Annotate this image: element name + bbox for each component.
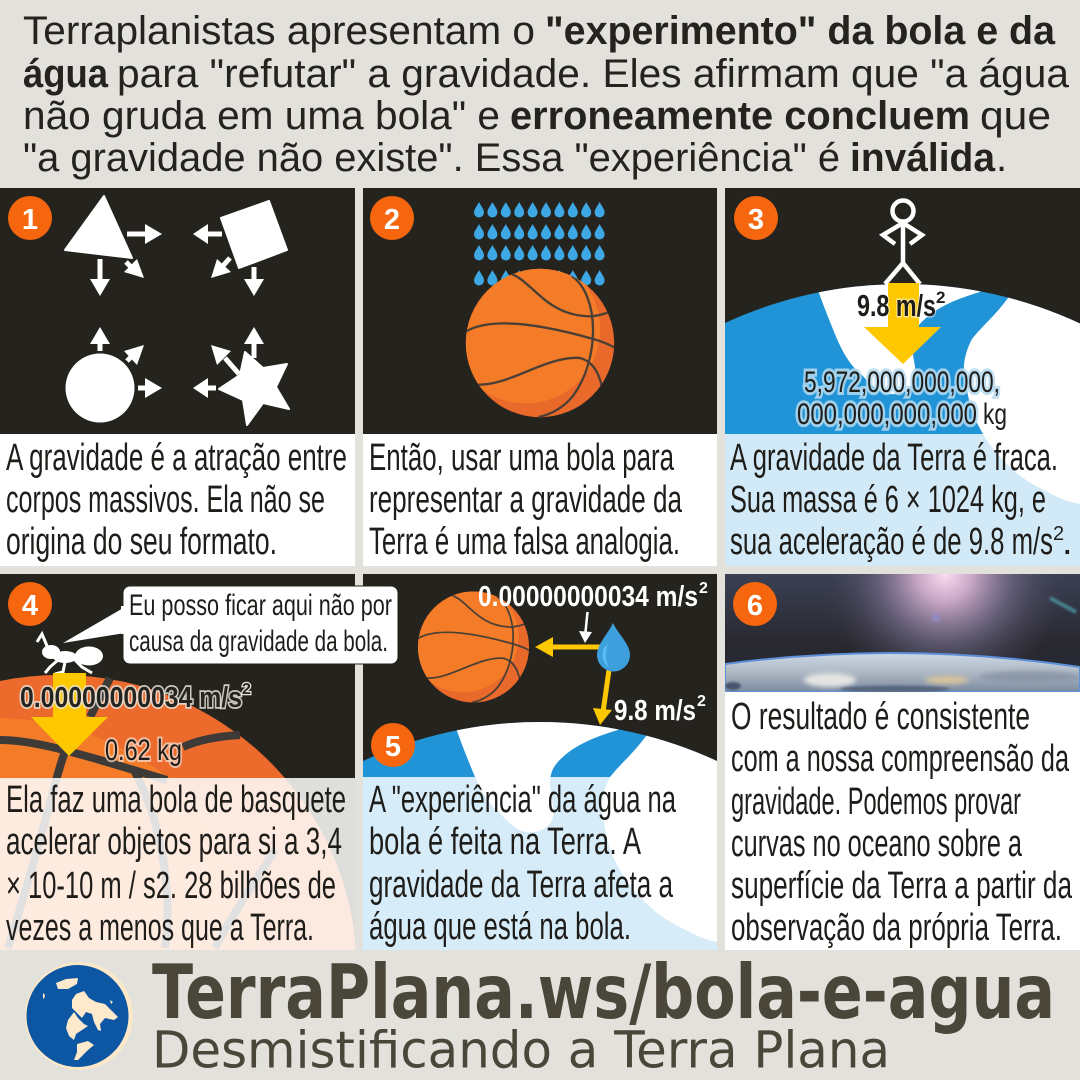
photo: Earth from orbit (725, 574, 1080, 692)
speech bubble: Eu posso ficar aqui não por (129, 589, 392, 622)
arrow: gravity down (864, 283, 941, 364)
icon: stick person (883, 200, 922, 284)
Earth globe (363, 722, 717, 950)
badge 5 (371, 723, 415, 767)
speech bubble: causa da gravidade da bola. (129, 625, 388, 658)
label: ball mass: 0.62 kg (105, 734, 182, 767)
title: "a gravidade não existe". Essa "experiência" é (23, 136, 840, 180)
text block 4: × 10-10 m / s2. 28 bilhões de (6, 865, 336, 907)
arrows: square gravity (193, 224, 264, 296)
label: acceleration: 2 (936, 288, 945, 307)
text block 3: . (1062, 521, 1073, 563)
label: Earth mass: 5,972,000,000,000, (804, 366, 1000, 399)
panel 2: ball and water (363, 188, 717, 566)
text block 4: Ela faz uma bola de basquete (6, 779, 346, 821)
label overlay (725, 434, 1080, 566)
label: Earth mass: 000,000,000,000 (797, 398, 977, 431)
text block 4: acelerar objetos para si a 3,4 (6, 821, 342, 863)
text block 2: representar a gravidade da (369, 479, 683, 521)
badge 5: 5 (385, 731, 401, 763)
arrows: triangle gravity (90, 224, 162, 296)
icon: water drops grid (474, 202, 605, 286)
badge 6: 6 (747, 590, 763, 622)
badge 4: 4 (22, 590, 38, 622)
text block 5: gravidade da Terra afeta a (369, 864, 674, 906)
badge 1: 1 (22, 204, 38, 236)
speech bubble (63, 586, 398, 664)
icon: square (221, 201, 287, 268)
text block 5: água que está na bola. (369, 906, 631, 948)
label: Earth acceleration: 9.8 m/s (614, 695, 696, 727)
arrow: gravity down (31, 673, 108, 756)
big basketball (0, 675, 355, 950)
icon: circle (66, 354, 134, 422)
icon: star (219, 352, 289, 425)
badge 2 (370, 196, 414, 240)
panel 1: shapes (0, 188, 355, 566)
badge 3: 3 (748, 204, 764, 236)
arrow: toward ball (535, 637, 602, 657)
text block 3: 2 (1053, 523, 1064, 545)
label: Earth acceleration: 2 (697, 693, 706, 710)
title: que (980, 94, 1051, 138)
text block 2 (369, 437, 683, 563)
text block 5 (369, 779, 677, 948)
icon: basketball (407, 581, 529, 703)
arrow: label pointer (579, 612, 592, 643)
panel 3: Earth gravity (724, 188, 1080, 566)
icon: flat Earth globe logo (25, 962, 133, 1070)
title: para "refutar" a gravidade. Eles afirmam que "a água (117, 52, 1070, 96)
text block 3 (730, 437, 1073, 563)
text block 2: Terra é uma falsa analogia. (369, 521, 680, 563)
badge 1 (8, 196, 52, 240)
badge 2: 2 (384, 204, 400, 236)
label: ball acceleration: 0.00000000034 m/s (478, 581, 698, 613)
title: Terraplanistas apresentam o (23, 9, 535, 53)
text block 1: corpos massivos. Ela não se (6, 479, 325, 521)
text block 1: origina do seu formato. (6, 521, 277, 563)
badge 3 (734, 196, 778, 240)
text block 2: Então, usar uma bola para (369, 437, 675, 479)
label: ball acceleration: 2 (242, 681, 251, 698)
icon: triangle (65, 196, 132, 258)
badge 6 (733, 582, 777, 626)
text block 5: bola é feita na Terra. A (369, 821, 641, 863)
label: ball acceleration: 2 (699, 580, 708, 597)
title: "experimento" da bola e da (545, 9, 1056, 53)
arrows: circle gravity (90, 327, 162, 398)
title: . (996, 136, 1007, 180)
title: água (23, 52, 109, 96)
panel 6: Earth photo (725, 574, 1080, 950)
arrow: toward Earth (593, 670, 612, 725)
title (23, 9, 1070, 180)
arrows: star gravity (193, 327, 264, 398)
text block 1: A gravidade é a atração entre (6, 437, 347, 479)
title: não gruda em uma bola" e (23, 94, 500, 138)
icon: ant (37, 634, 103, 674)
title: erroneamente concluem (510, 94, 970, 138)
text block 5: A "experiência" da água na (369, 779, 677, 821)
label: Earth mass: kg (983, 398, 1007, 431)
label: Earth mass (797, 366, 1007, 431)
icon: basketball (451, 255, 614, 417)
icon: water drop (597, 623, 630, 672)
Earth globe (724, 277, 1080, 566)
badge 4 (8, 582, 52, 626)
text block 1 (6, 437, 347, 563)
label: acceleration: 9.8 m/s (857, 288, 936, 323)
text block 4: vezes a menos que a Terra. (6, 907, 314, 949)
footer: tagline: Desmistificando a Terra Plana (152, 1022, 890, 1080)
title: inválida (850, 136, 996, 180)
panel 4: ant on ball (0, 574, 355, 950)
text overlay (363, 777, 717, 950)
label: ball acceleration: 0.00000000034 m/s (20, 682, 242, 714)
text block 4 (6, 779, 346, 949)
text block 6 (731, 696, 1073, 949)
text overlay (0, 778, 355, 950)
panel 5: water on ball on Earth (363, 574, 717, 950)
